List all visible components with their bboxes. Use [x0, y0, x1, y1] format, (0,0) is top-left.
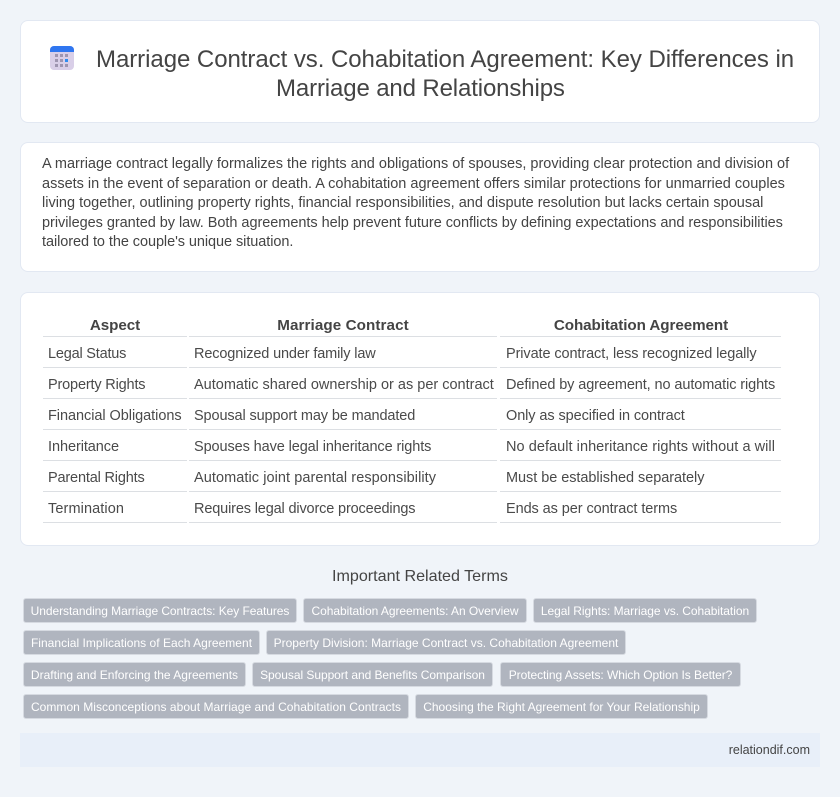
tag — [415, 694, 708, 719]
text block: summary paragraph: assets in the event of separation or death. A cohabitation agreement offers similar protections for unmarried couples — [42, 176, 785, 192]
panel: comparison table — [20, 292, 820, 546]
row: legal status — [48, 346, 757, 362]
text block: summary paragraph: A marriage contract legally formalizes the rights and obligations of spouses, providing clear protection and division of — [42, 156, 789, 172]
row: legal status: Recognized under family law — [194, 346, 376, 362]
tag: Financial Implications of Each Agreement — [31, 636, 252, 650]
tag: Legal Rights: Marriage vs. Cohabitation — [541, 604, 749, 618]
tag: Drafting and Enforcing the Agreements — [31, 668, 238, 682]
row: financial obligations — [48, 408, 685, 424]
row: termination: Ends as per contract terms — [506, 501, 677, 517]
title — [96, 46, 794, 102]
panel: title card — [20, 20, 820, 123]
title: Marriage and Relationships — [276, 75, 565, 102]
tag: Choosing the Right Agreement for Your Relationship — [423, 700, 700, 714]
tag: Protecting Assets: Which Option Is Better? — [509, 668, 732, 682]
table header: Marriage Contract — [277, 317, 409, 334]
tag — [23, 630, 260, 655]
row: parental rights: Parental Rights — [48, 470, 145, 486]
text block: summary paragraph — [42, 156, 790, 250]
tag — [23, 662, 246, 687]
row: financial obligations: Financial Obligations — [48, 408, 182, 424]
footer: site name: relationdif.com — [729, 743, 810, 757]
row: financial obligations: Only as specified in contract — [506, 408, 685, 424]
row: property rights — [48, 377, 775, 393]
tag — [533, 598, 757, 623]
text block: summary paragraph: privileges granted by law. Both agreements help prevent future conflicts by defining expectations and responsibilities — [42, 215, 783, 231]
row: legal status: Legal Status — [48, 346, 126, 362]
row: inheritance — [48, 439, 775, 455]
tag — [266, 630, 626, 655]
row: property rights: Automatic shared ownership or as per contract — [194, 377, 494, 393]
table header: Cohabitation Agreement — [554, 317, 728, 334]
icon: calendar — [50, 46, 74, 70]
panel: summary — [20, 142, 820, 272]
footer bar — [20, 733, 820, 767]
row: inheritance: Inheritance — [48, 439, 119, 455]
row: property rights: Property Rights — [48, 377, 145, 393]
row: termination: Requires legal divorce proceedings — [194, 501, 415, 517]
text block: summary paragraph: living together, outlining property rights, financial responsibilities, and dispute resolution but lacks certain spousal — [42, 195, 763, 211]
tag — [252, 662, 493, 687]
row: termination — [48, 501, 677, 517]
table header — [90, 317, 728, 334]
tag — [500, 662, 741, 687]
tag: Understanding Marriage Contracts: Key Features — [31, 604, 289, 618]
tag: Common Misconceptions about Marriage and Cohabitation Contracts — [31, 700, 401, 714]
row: inheritance: No default inheritance rights without a will — [506, 439, 775, 455]
row: property rights: Defined by agreement, no automatic rights — [506, 377, 775, 393]
heading: important related terms: Important Related Terms — [332, 567, 508, 585]
row: financial obligations: Spousal support may be mandated — [194, 408, 415, 424]
tag — [23, 694, 409, 719]
row: parental rights — [48, 470, 704, 486]
tag: Spousal Support and Benefits Comparison — [260, 668, 485, 682]
row: termination: Termination — [48, 501, 124, 517]
text block: summary paragraph: tailored to the couple's unique situation. — [42, 234, 293, 250]
tag — [23, 598, 297, 623]
tag — [303, 598, 527, 623]
row: parental rights: Automatic joint parental responsibility — [194, 470, 436, 486]
row: inheritance: Spouses have legal inheritance rights — [194, 439, 431, 455]
panel: related term tags — [23, 598, 757, 719]
row: parental rights: Must be established separately — [506, 470, 704, 486]
title: Marriage Contract vs. Cohabitation Agreement: Key Differences in — [96, 46, 794, 73]
tag: Cohabitation Agreements: An Overview — [312, 604, 518, 618]
tag: Property Division: Marriage Contract vs. Cohabitation Agreement — [274, 636, 618, 650]
table header: Aspect — [90, 317, 140, 334]
row: legal status: Private contract, less recognized legally — [506, 346, 757, 362]
